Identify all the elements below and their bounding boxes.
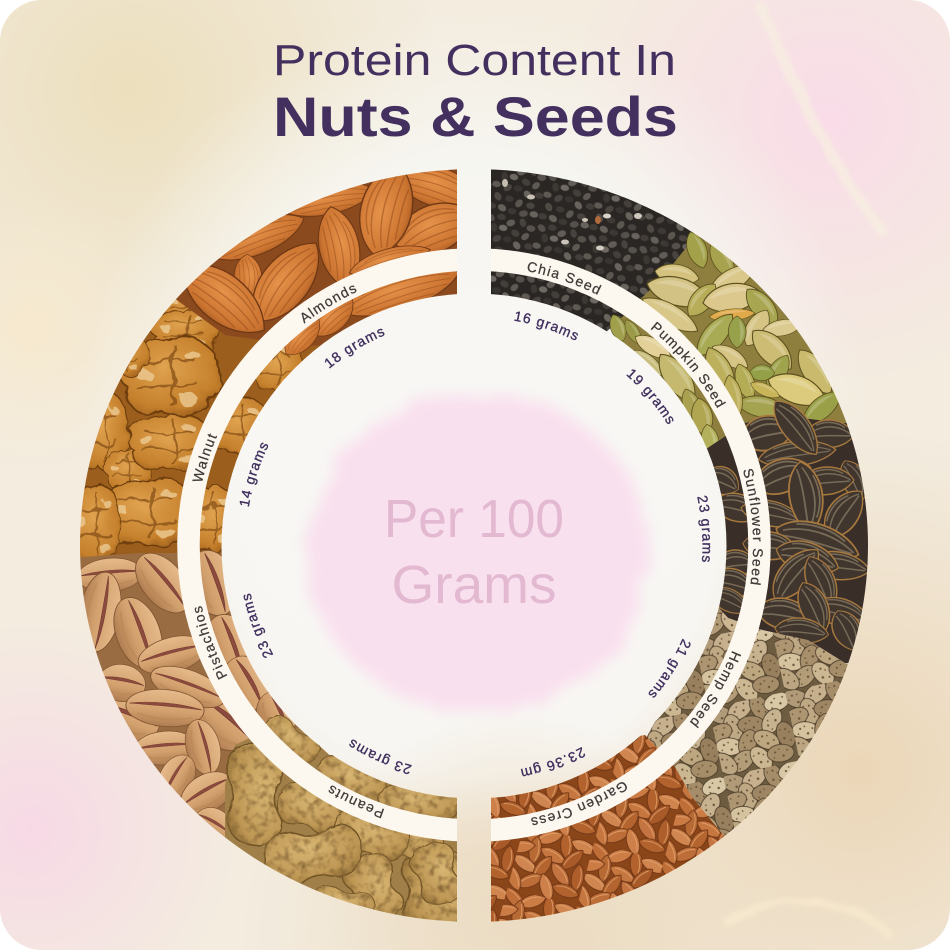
ring label: Sunflower Seed: Sunflower Seed — [744, 468, 763, 585]
value: walnut 14 grams: 14 grams — [240, 442, 268, 507]
center text: Grams — [392, 555, 556, 615]
value: pistachios 23 grams: 23 grams — [244, 594, 274, 658]
title: Protein Content In — [273, 36, 676, 85]
segment: pumpkin seed — [610, 232, 846, 448]
ring label: Peanuts: Peanuts — [328, 786, 384, 818]
segment: peanuts — [225, 715, 457, 922]
value: pumpkin 19 grams: 19 grams — [626, 369, 674, 424]
ring label: Walnut: Walnut — [192, 433, 217, 482]
segment: pistachios — [80, 550, 299, 838]
ring label: Almonds: Almonds — [302, 286, 356, 324]
ring label: Pumpkin Seed: Pumpkin Seed — [650, 322, 726, 408]
ring label: Chia Seed: Chia Seed — [528, 262, 602, 295]
segment: chia seed — [491, 169, 693, 332]
segment: almonds — [176, 169, 457, 355]
value: chia 16 grams: 16 grams — [514, 312, 578, 340]
center text — [384, 489, 564, 615]
value: peanuts 23 grams: 23 grams — [349, 740, 412, 774]
segment: garden cress — [491, 735, 725, 930]
food photo donut — [70, 152, 880, 932]
value: hemp 21 grams: 21 grams — [648, 638, 691, 698]
ring label: Hemp Seed: Hemp Seed — [690, 651, 742, 728]
segment: hemp seed — [646, 608, 848, 836]
title — [273, 36, 678, 148]
title: Nuts & Seeds — [273, 85, 678, 148]
value: almonds 18 grams: 18 grams — [324, 328, 384, 368]
segment: sunflower seed — [707, 400, 868, 664]
cream label ring — [188, 260, 760, 830]
value: sunflower 23 grams: 23 grams — [697, 496, 710, 562]
center text: Per 100 — [384, 489, 564, 549]
ring label: Garden Cress: Garden Cress — [531, 782, 627, 826]
ring label: Pistachios: Pistachios — [194, 606, 228, 680]
segment: walnut — [80, 299, 320, 558]
value: garden cress 23.36 gm: 23.36 gm — [520, 747, 586, 776]
center pink blob — [306, 393, 650, 713]
